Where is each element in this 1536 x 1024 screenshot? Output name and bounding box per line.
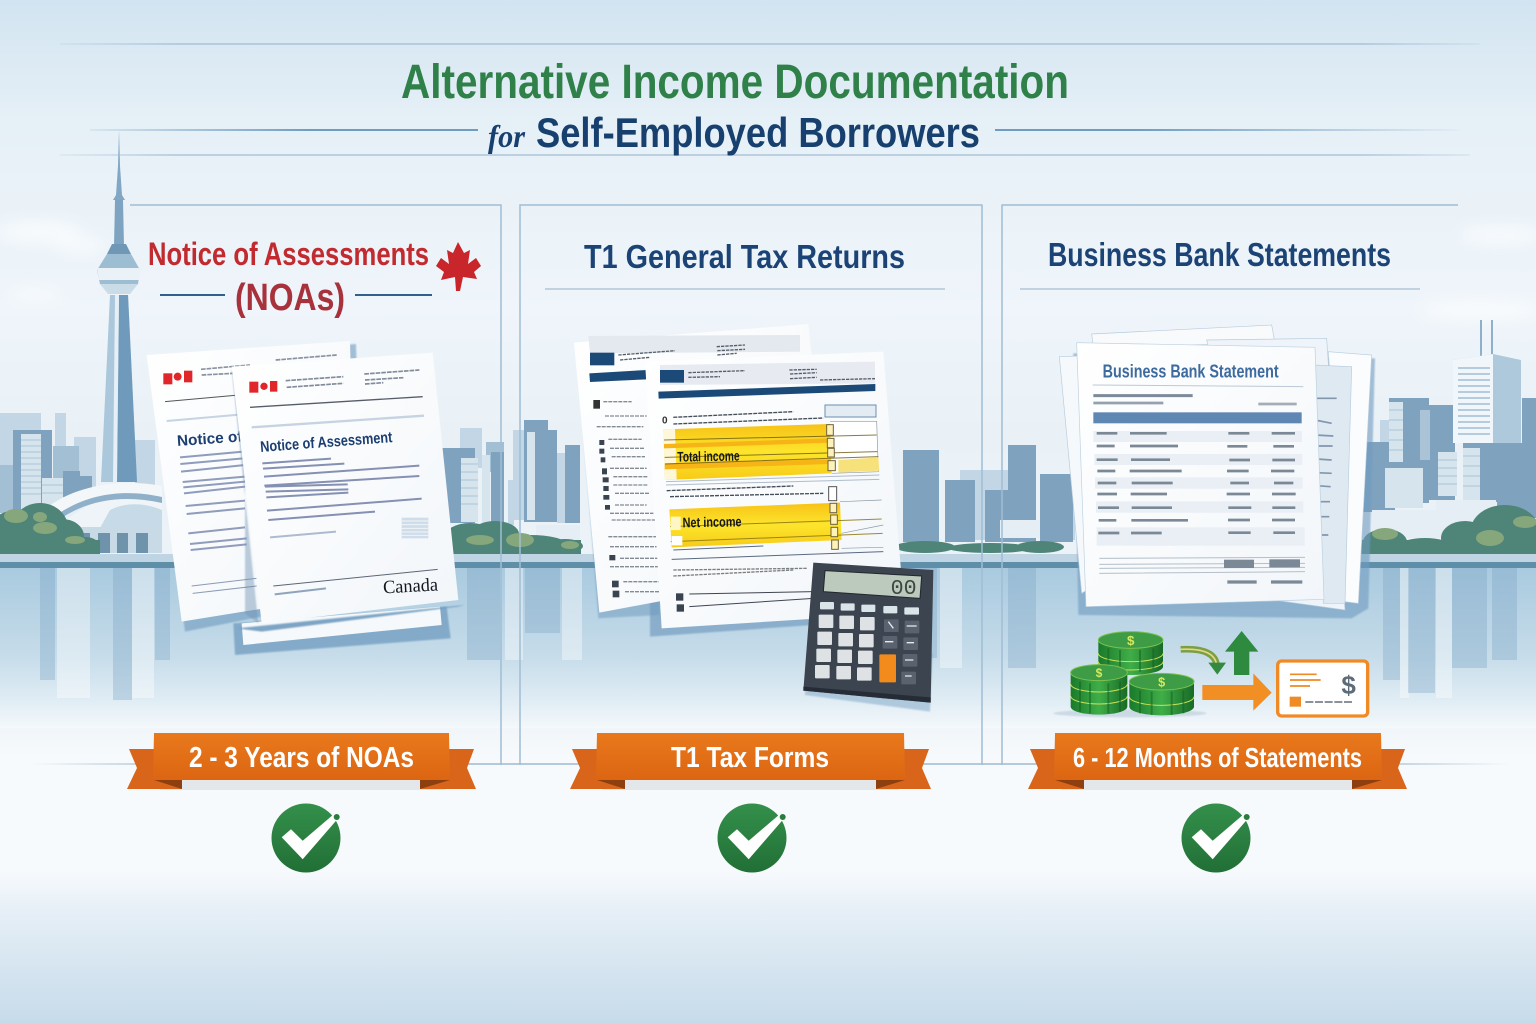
highlight: net income <box>669 500 883 549</box>
coin stack <box>1129 673 1194 715</box>
skyline <box>0 320 1536 542</box>
trees <box>0 503 1536 555</box>
decorative lines <box>30 44 1510 764</box>
icon: deposit slip: $ <box>1341 670 1356 700</box>
arrow: up <box>1225 631 1258 675</box>
panel: Notice of Assessments <box>127 205 501 872</box>
ribbon: statements <box>1028 733 1407 790</box>
title <box>90 56 1460 156</box>
back pages <box>1059 325 1372 610</box>
ribbon: 2-3 years: 2 - 3 Years of NOAs <box>189 742 414 774</box>
front form <box>645 352 902 628</box>
waterline and lake <box>0 554 1536 728</box>
display value: 00 <box>891 577 917 601</box>
statement title: Business Bank Statement <box>1103 361 1279 382</box>
back form <box>574 324 812 613</box>
clouds <box>0 221 1536 320</box>
front page <box>1077 343 1324 607</box>
dome stadium <box>40 483 162 553</box>
heading: NOA: Notice of Assessments <box>148 236 429 272</box>
ribbon: T1: T1 Tax Forms <box>671 742 829 774</box>
title line 1: Alternative Income Documentation <box>401 56 1069 109</box>
highlight: total income: Total income <box>677 448 740 465</box>
tall building <box>1453 320 1521 443</box>
heading: NOA: (NOAs) <box>235 277 345 319</box>
coin stack: $ <box>1158 675 1165 689</box>
back page <box>147 341 357 622</box>
ribbon: 2-3 years <box>127 733 476 790</box>
icon: CN tower <box>97 130 141 482</box>
ribbon: statements: 6 - 12 Months of Statements <box>1073 742 1362 773</box>
icon: check <box>272 804 340 872</box>
title line 2: for <box>488 118 526 154</box>
documents: T1 forms <box>574 324 933 712</box>
panel: Business Bank Statements <box>1002 205 1458 872</box>
coin stack <box>1071 665 1127 715</box>
arrow: right <box>1202 673 1272 711</box>
highlight: net income: Net income <box>682 513 742 530</box>
icon: check <box>1182 804 1250 872</box>
documents: bank statement <box>1059 325 1375 618</box>
title line 2: Self-Employed Borrowers <box>536 109 980 156</box>
documents: NOA pages <box>147 341 465 655</box>
panel: T1 General Tax Returns <box>520 205 982 872</box>
wordmark: Canada <box>382 574 439 598</box>
coin stack <box>1098 632 1163 675</box>
icon: deposit slip <box>1278 661 1368 716</box>
icon: check <box>718 804 786 872</box>
building windows <box>21 402 1480 523</box>
front page <box>232 353 458 623</box>
heading: NOA <box>148 236 432 319</box>
heading: bank: Business Bank Statements <box>1048 236 1391 273</box>
front form: 0 <box>662 415 668 426</box>
icon: calculator <box>803 563 933 712</box>
icon: maple leaf <box>436 242 481 291</box>
document title: Notice of Assessment <box>260 429 393 456</box>
highlight: total income <box>663 421 879 480</box>
coin stack: $ <box>1096 666 1103 680</box>
arrow: curved down <box>1181 649 1226 675</box>
heading: T1: T1 General Tax Returns <box>584 238 905 275</box>
icon: coins and arrows <box>1053 631 1368 717</box>
back page: Notice of Assessment <box>176 422 337 450</box>
coin stack: $ <box>1127 633 1135 648</box>
ribbon: T1 <box>570 733 931 790</box>
